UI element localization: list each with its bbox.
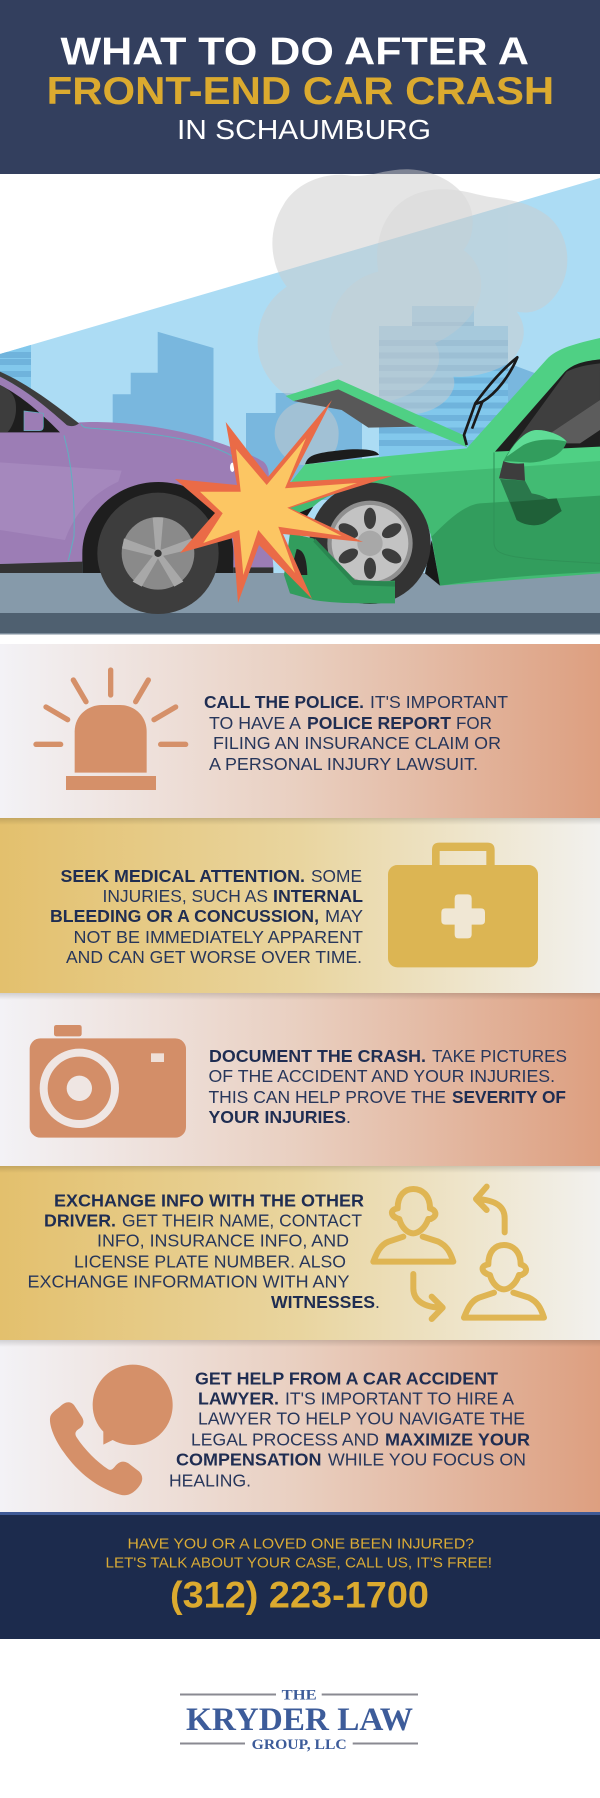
- illustration: front-end car crash: [0, 169, 600, 634]
- wheel: [309, 483, 431, 604]
- text: document the crash: TAKE PICTURES: [432, 1046, 567, 1066]
- text: get help from a lawyer: [169, 1368, 530, 1490]
- text: seek medical attention: AND CAN GET WORSE OVER TIME.: [66, 947, 362, 967]
- icon: police siren: [36, 670, 186, 790]
- person one: [373, 1189, 453, 1262]
- text: call the police: FILING AN INSURANCE CLAIM OR: [213, 733, 501, 753]
- text: call the police: POLICE REPORT: [307, 713, 451, 733]
- text: document the crash: [208, 1046, 567, 1127]
- title line 1: WHAT TO DO AFTER A: [60, 30, 529, 74]
- text: seek medical attention: NOT BE IMMEDIATELY APPARENT: [74, 927, 363, 947]
- text: exchange info: DRIVER.: [44, 1210, 116, 1230]
- panel: seek medical attention: [0, 818, 600, 993]
- text: seek medical attention: INTERNAL: [273, 886, 363, 906]
- text: get help from a lawyer: LAWYER TO HELP YOU NAVIGATE THE: [198, 1408, 525, 1428]
- text: question: HAVE YOU OR A LOVED ONE BEEN INJURED?: [128, 1536, 474, 1552]
- smoke cloud: [258, 169, 567, 415]
- logo: the kryder law group: KRYDER LAW: [186, 1702, 413, 1738]
- text: document the crash: YOUR INJURIES: [208, 1107, 346, 1127]
- text: document the crash: SEVERITY OF: [452, 1087, 566, 1107]
- text: document the crash: .: [346, 1107, 351, 1127]
- text: exchange info: LICENSE PLATE NUMBER. ALSO: [74, 1251, 346, 1271]
- wiper: [464, 357, 517, 445]
- icon: phone and speech bubble: [50, 1365, 173, 1495]
- text: seek medical attention: INJURIES, SUCH AS: [102, 886, 268, 906]
- panel: get help from a lawyer: [0, 1340, 600, 1512]
- road: [0, 573, 600, 634]
- side mirror: [503, 430, 567, 463]
- arrow down-right: [413, 1274, 443, 1319]
- panel: exchange info: [0, 1166, 600, 1340]
- impact star: [175, 400, 392, 603]
- text: get help from a lawyer: IT'S IMPORTANT TO HIRE A: [285, 1388, 514, 1408]
- arrow up-left: [476, 1187, 505, 1232]
- front bumper: [284, 533, 395, 603]
- text: get help from a lawyer: MAXIMIZE YOUR: [385, 1430, 530, 1450]
- panel: call the police: [0, 644, 600, 818]
- logo: the kryder law group: GROUP, LLC: [252, 1737, 347, 1753]
- panel: document the crash: [0, 993, 600, 1166]
- text: invitation: LET'S TALK ABOUT YOUR CASE, CALL US, IT'S FREE!: [106, 1554, 492, 1571]
- text: get help from a lawyer: LAWYER.: [198, 1388, 279, 1408]
- green body middle: [290, 461, 600, 586]
- text: document the crash: OF THE ACCIDENT AND YOUR INJURIES.: [208, 1066, 555, 1086]
- text: call the police: [204, 692, 508, 774]
- text: exchange info: EXCHANGE INFO WITH THE OTHER: [54, 1190, 364, 1210]
- smoke near crash point: [275, 401, 339, 465]
- engine bay: [305, 449, 379, 464]
- purple car wheel: [97, 493, 219, 614]
- title line 2: FRONT-END CAR CRASH: [47, 69, 554, 113]
- text: exchange info: .: [375, 1292, 380, 1312]
- icon: camera: [30, 1025, 186, 1138]
- side mirror shadow: [500, 479, 562, 525]
- logo: the kryder law group: [180, 1687, 418, 1753]
- text: exchange info: GET THEIR NAME, CONTACT: [122, 1210, 362, 1230]
- text: document the crash: DOCUMENT THE CRASH.: [209, 1046, 426, 1066]
- open hood: [293, 389, 418, 428]
- windshield: [490, 353, 600, 457]
- text: call the police: IT'S IMPORTANT: [370, 692, 508, 712]
- text: exchange info: INFO, INSURANCE INFO, AND: [97, 1230, 349, 1250]
- green body lower: [432, 496, 600, 586]
- text: call the police: FOR: [456, 713, 492, 733]
- text: call the police: CALL THE POLICE.: [204, 692, 364, 712]
- text: seek medical attention: SEEK MEDICAL ATTENTION.: [60, 866, 305, 886]
- panel: call to action: [0, 1512, 600, 1639]
- text: call the police: A PERSONAL INJURY LAWSUIT.: [209, 754, 478, 774]
- green body upper: [290, 338, 600, 487]
- text: get help from a lawyer: HEALING.: [169, 1470, 251, 1490]
- city buildings: [0, 306, 540, 500]
- text: document the crash: THIS CAN HELP PROVE THE: [208, 1087, 446, 1107]
- purple car: [0, 372, 273, 573]
- text: call the police: TO HAVE A: [209, 713, 301, 733]
- green car: [284, 338, 600, 604]
- wheel arch: [425, 540, 440, 586]
- text: get help from a lawyer: GET HELP FROM A CAR ACCIDENT: [195, 1368, 498, 1388]
- sky: [0, 178, 600, 634]
- text: get help from a lawyer: COMPENSATION: [176, 1450, 322, 1470]
- subtitle: IN SCHAUMBURG: [177, 114, 431, 145]
- text: get help from a lawyer: WHILE YOU FOCUS ON: [328, 1450, 526, 1470]
- icon: two people exchanging: [373, 1187, 544, 1319]
- header banner: [0, 0, 600, 174]
- door line: [494, 452, 600, 563]
- person two: [464, 1245, 544, 1318]
- icon: first aid kit: [388, 843, 538, 967]
- text: seek medical attention: SOME: [311, 866, 362, 886]
- text: seek medical attention: BLEEDING OR A CONCUSSION,: [50, 906, 319, 926]
- text: seek medical attention: MAY: [325, 906, 363, 926]
- text: exchange info: EXCHANGE INFORMATION WITH ANY: [28, 1271, 350, 1291]
- text: exchange info: WITNESSES: [271, 1292, 375, 1312]
- logo: the kryder law group: THE: [282, 1687, 317, 1703]
- text: get help from a lawyer: LEGAL PROCESS AND: [191, 1430, 379, 1450]
- text: seek medical attention: [50, 866, 363, 967]
- text: exchange info: [28, 1190, 380, 1312]
- phone number: (312) 223-1700: [170, 1574, 429, 1615]
